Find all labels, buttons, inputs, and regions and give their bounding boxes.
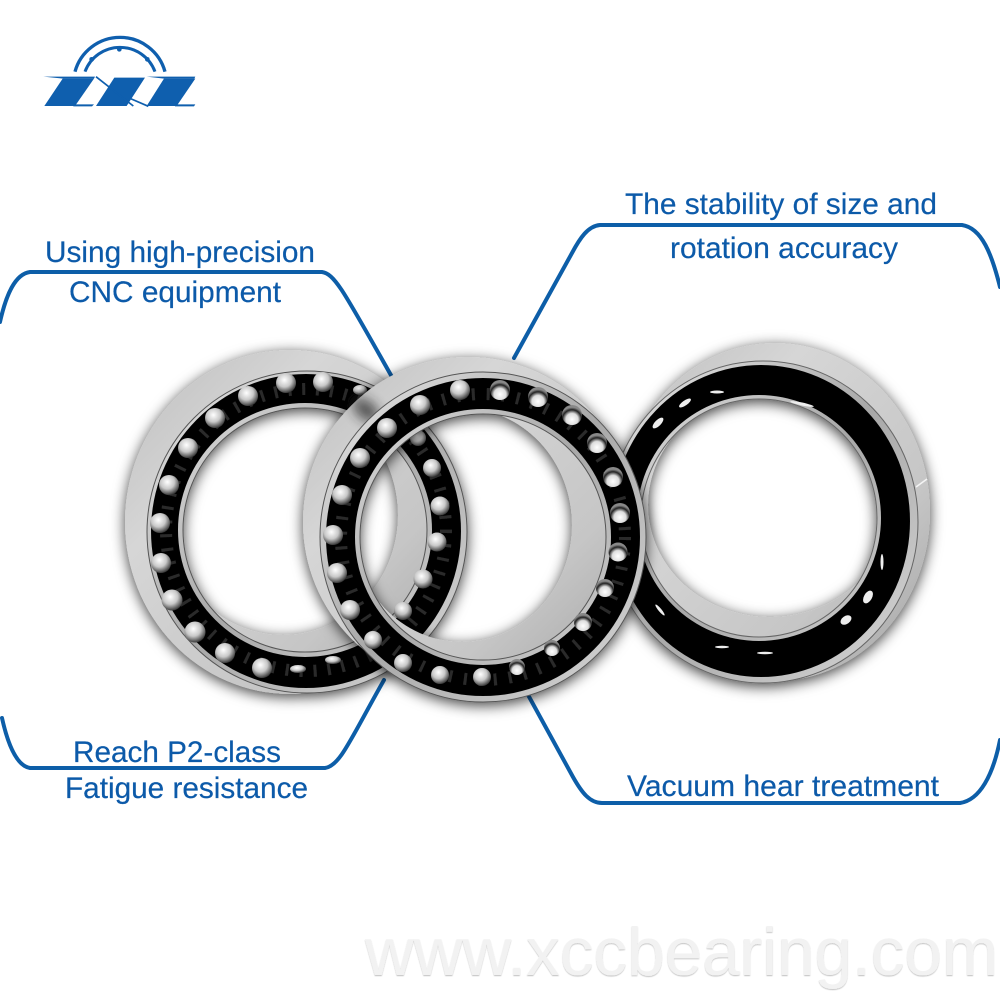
- callout line: top left: [0, 272, 392, 377]
- label: stability of size: The stability of size and: [625, 188, 937, 221]
- bearing: left: [125, 350, 467, 694]
- right bearing seal: [612, 365, 910, 677]
- left bearing balls: [150, 372, 450, 678]
- middle bearing black ring: [326, 378, 640, 696]
- left bearing body: [125, 350, 455, 694]
- bearing: right: [608, 343, 930, 683]
- right bearing highlights: [651, 390, 884, 654]
- label: fatigue resistance: Fatigue resistance: [65, 772, 308, 805]
- left bearing rim: [147, 371, 467, 693]
- middle bearing body: [303, 357, 633, 687]
- logo arc: [75, 37, 165, 72]
- label: reach p2-class: Reach P2-class: [73, 736, 281, 769]
- callout line: top right: [514, 225, 1000, 358]
- watermark: www.xccbearing.com: [364, 914, 998, 990]
- callout line: bottom left: [2, 680, 384, 768]
- middle bearing cage: [341, 394, 625, 680]
- middle bearing balls: [323, 380, 630, 686]
- middle bearing junction shadow: [348, 393, 384, 427]
- label: vacuum heat treatment: Vacuum hear treatment: [627, 770, 940, 803]
- label: using high-precision: Using high-precision: [45, 236, 315, 269]
- bearing: middle: [303, 357, 646, 702]
- label: rotation accuracy: rotation accuracy: [670, 232, 898, 265]
- callout line: bottom right: [527, 693, 1000, 803]
- right bearing rim: [608, 361, 918, 683]
- right bearing body: [620, 343, 930, 681]
- left bearing black ring: [151, 374, 461, 688]
- logo: [43, 37, 195, 106]
- middle bearing rim: [320, 372, 646, 702]
- label: cnc equipment: CNC equipment: [69, 276, 282, 309]
- logo letters: [43, 77, 195, 106]
- left bearing cage: [166, 389, 446, 671]
- right bearing glint: [916, 479, 927, 487]
